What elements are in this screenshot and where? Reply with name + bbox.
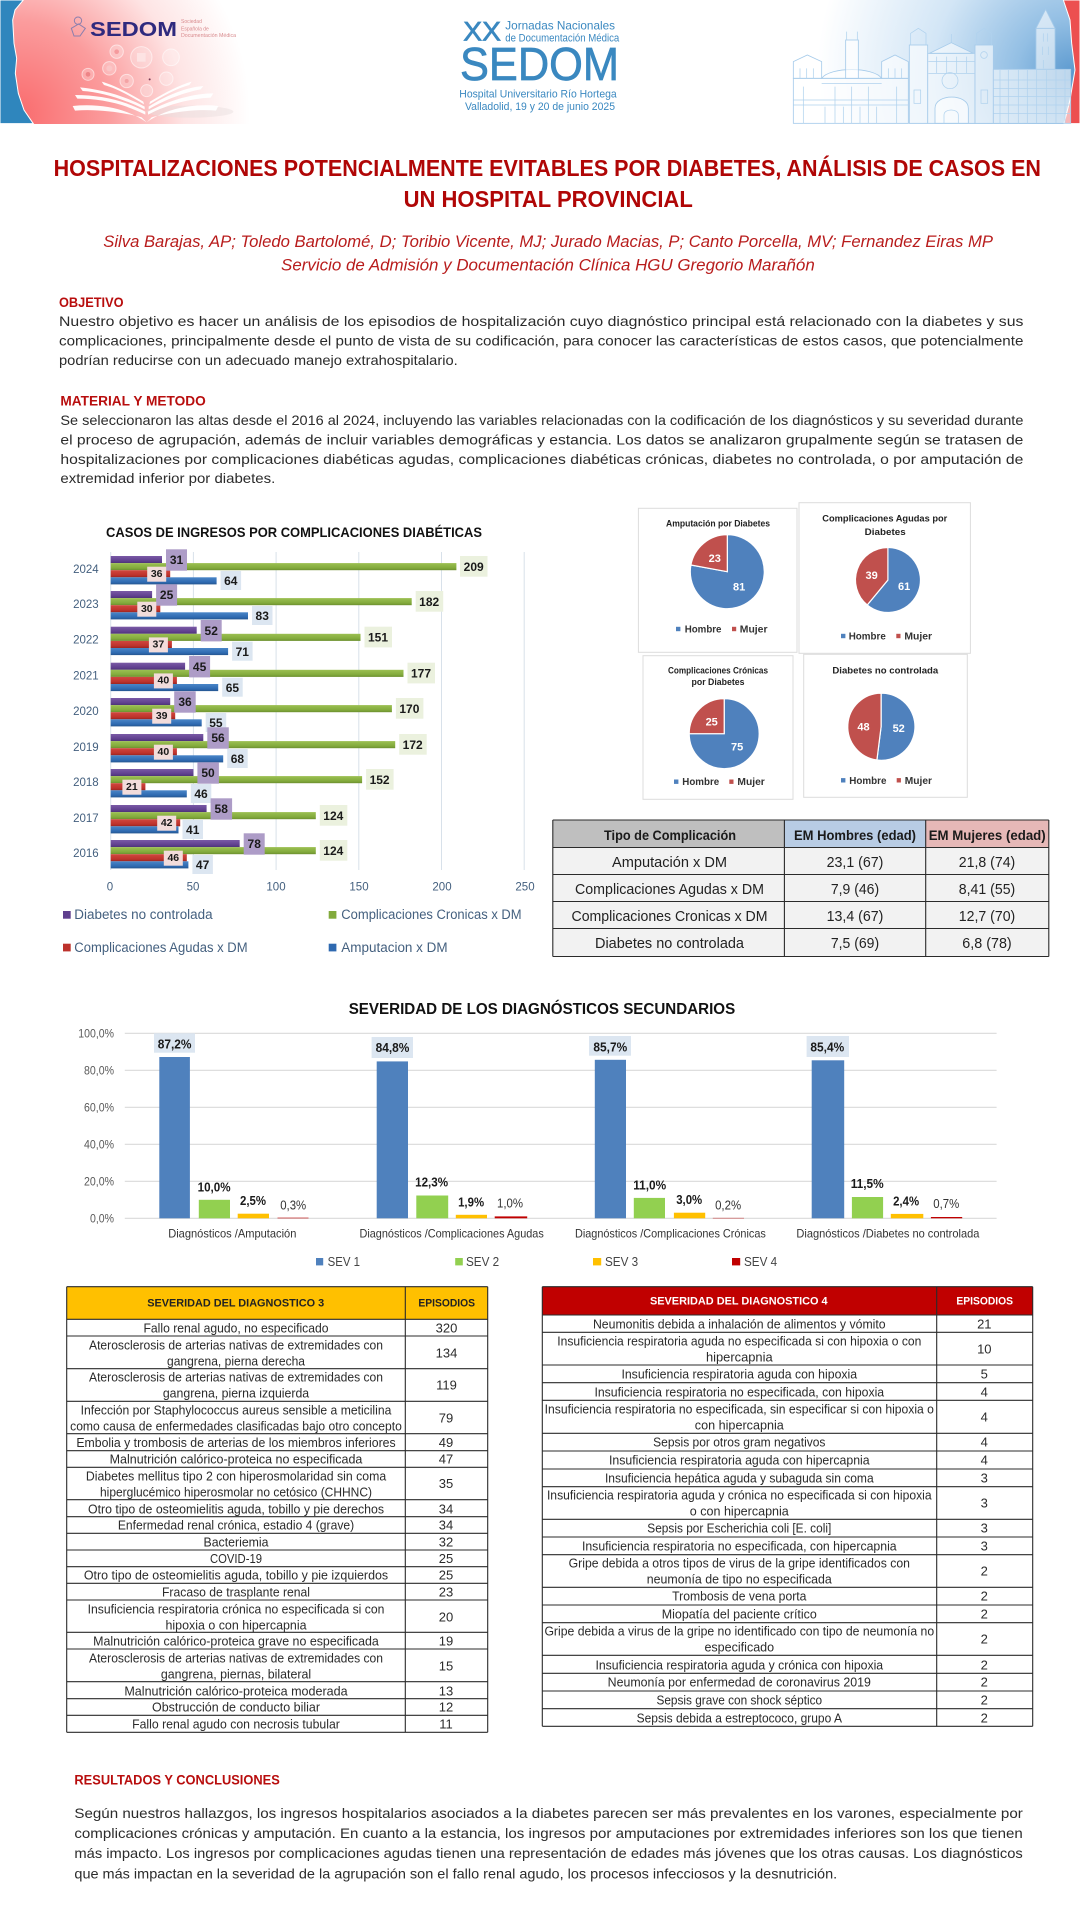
year 2024: 64: [224, 574, 238, 588]
year 2019: 2019: [73, 742, 99, 754]
text block: resultados: que más impactan en la severidad de la agrupación son el fallo renal agudo, los procesos infecciosos y la desnutrición.: [74, 1866, 837, 1882]
pie chart: complicaciones agudas: Mujer: [904, 632, 932, 642]
table: severidad del diagnostico 3: 20: [439, 1609, 453, 1624]
group: complicaciones agudas: 1,9%: [458, 1196, 484, 1210]
table: severidad del diagnostico 4: 2: [981, 1657, 988, 1672]
icon: church facade: [909, 28, 993, 123]
year 2024: 31: [170, 553, 183, 567]
chart legend: Diabetes no controlada: [74, 907, 213, 922]
year 2016: 46: [167, 852, 179, 864]
icon: society logo: [71, 17, 85, 36]
table: estancia media por complicación: Complicaciones Agudas x DM: [575, 882, 764, 898]
bar chart: casos de ingresos: [63, 524, 535, 955]
text block: material y metodo: el proceso de agrupación, además de incluir variables demográficas y estancia. Los datos se analizaron grupalmente según se tratasen de: [60, 432, 1024, 448]
year 2024: 2024: [73, 564, 99, 576]
chart legend: Complicaciones Cronicas x DM: [341, 907, 522, 922]
table: estancia media por complicación: 7,5 (69): [831, 936, 879, 952]
group: amputación: [154, 1033, 308, 1218]
table: severidad del diagnostico 4: Insuficiencia respiratoria aguda no especificada si con hipoxia o con: [557, 1333, 921, 1348]
table: severidad del diagnostico 3: hipoxia o con hipercapnia: [166, 1617, 307, 1632]
text block: material y metodo: Se seleccionaron las altas desde el 2016 al 2024, incluyendo las variables relacionadas con la codificación de los diagnósticos y su severidad durante: [60, 412, 1024, 428]
table: estancia media por complicación: Amputación x DM: [612, 855, 727, 871]
icon: town hall building: [793, 32, 908, 123]
table: severidad del diagnostico 3: 49: [439, 1435, 453, 1450]
text block: material y metodo: hospitalizaciones por complicaciones diabéticas agudas, complicaciones diabéticas crónicas, diabetes no controlada, o por amputación de: [60, 451, 1024, 467]
pie chart: amputación por diabetes: 81: [733, 581, 745, 593]
table: severidad del diagnostico 4: especificado: [704, 1639, 774, 1654]
year 2018: 21: [126, 781, 138, 793]
logo subtitle: Sociedad: [181, 19, 202, 25]
table: estancia media por complicación: 13,4 (67): [827, 909, 883, 925]
group: complicaciones agudas: [372, 1037, 527, 1218]
table: estancia media por complicación: 7,9 (46): [831, 882, 879, 898]
table: severidad del diagnostico 3: Malnutrición calórico-proteica grave no especificada: [93, 1633, 380, 1648]
chart legend: SEV 4: [744, 1254, 777, 1269]
torn blue band: [0, 0, 33, 124]
year 2022: 71: [236, 645, 249, 659]
table: severidad del diagnostico 4: Insuficiencia respiratoria no especificada, con hipercapnia: [582, 1538, 897, 1553]
table: severidad del diagnostico 3: 25: [439, 1551, 453, 1566]
pie chart: diabetes no controlada: Hombre: [849, 776, 887, 787]
x axis labels: 50: [187, 882, 199, 894]
group: amputación: 2,5%: [240, 1194, 266, 1208]
table: severidad del diagnostico 4: Sepsis por Escherichia coli [E. coli]: [647, 1520, 831, 1535]
y axis labels: [78, 1028, 114, 1225]
group: amputación: 87,2%: [158, 1038, 192, 1052]
table: severidad del diagnostico 4: 2: [981, 1606, 988, 1621]
table: severidad del diagnostico 4: Insuficiencia respiratoria no especificada, sin especificar si con hipoxia o: [545, 1401, 934, 1416]
year 2023: 182: [419, 595, 440, 609]
table: severidad del diagnostico 4: Insuficiencia respiratoria aguda y crónica con hipoxia: [595, 1657, 884, 1672]
table: severidad del diagnostico 4: hipercapnia: [706, 1349, 773, 1364]
text block: material y metodo: extremidad inferior por diabetes.: [60, 470, 275, 486]
text block: resultados: complicaciones crónicas y amputación. En cuanto a la estancia, los ingresos por amputaciones por extremidades inferiores son los que tienen: [74, 1825, 1023, 1841]
logo subtitle: Española de: [181, 26, 209, 32]
group: diabetes no controlada: 11,5%: [851, 1177, 884, 1191]
banner: congress logo: XX: [463, 17, 501, 47]
chart heading: SEVERIDAD DE LOS DIAGNÓSTICOS SECUNDARIOS: [349, 999, 736, 1018]
year 2018: 46: [194, 787, 208, 801]
year 2024: 209: [464, 560, 484, 574]
year 2017: 42: [161, 817, 173, 829]
table: estancia media por complicación: Tipo de Complicación: [604, 827, 736, 843]
year 2021: 2021: [73, 671, 99, 683]
table: estancia media por complicación: 6,8 (78): [962, 936, 1012, 952]
year 2017: 2017: [73, 813, 99, 825]
bubbles of documents: [82, 45, 179, 97]
group: complicaciones crónicas: 85,7%: [593, 1040, 627, 1054]
table: severidad del diagnostico 3: Fallo renal agudo con necrosis tubular: [132, 1716, 340, 1731]
y axis labels: 60,0%: [84, 1102, 114, 1114]
table: severidad del diagnostico 3: 79: [439, 1410, 453, 1425]
text block: objetivo: complicaciones, principalmente desde el punto de vista de su codificación, para conocer las características de estos casos, que potencialmente: [59, 332, 1024, 348]
pie chart: amputación por diabetes: Hombre: [685, 624, 722, 636]
table: severidad del diagnostico 3: Insuficiencia respiratoria crónica no especificada si con: [88, 1601, 384, 1616]
year 2023: 30: [141, 603, 153, 615]
group: complicaciones crónicas: 0,2%: [715, 1198, 741, 1212]
table: severidad del diagnostico 4: 2: [981, 1674, 988, 1689]
year 2016: 47: [196, 858, 210, 872]
year 2016: 2016: [73, 848, 99, 860]
year 2022: [73, 620, 392, 661]
table: severidad del diagnostico 4: EPISODIOS: [956, 1296, 1013, 1308]
pie chart: complicaciones crónicas: 25: [706, 717, 718, 729]
banner: congress logo: Hospital Universitario Río Hortega: [459, 88, 618, 100]
pie chart: amputación por diabetes: [638, 508, 797, 652]
year 2016: 78: [248, 837, 261, 851]
year 2021: 40: [158, 675, 169, 687]
y axis labels: 40,0%: [84, 1139, 114, 1151]
banner: congress logo: de Documentación Médica: [505, 32, 620, 44]
table: severidad del diagnostico 4: o con hipercapnia: [690, 1503, 790, 1518]
table: severidad del diagnostico 3: Enfermedad renal crónica, estadio 4 (grave): [118, 1517, 354, 1532]
section: material y metodo: [60, 394, 1024, 486]
table: severidad del diagnostico 3: 34: [439, 1517, 453, 1532]
table: estancia media por complicación: 21,8 (74): [959, 855, 1015, 871]
table: severidad del diagnostico 4: 4: [981, 1409, 988, 1424]
text block: objetivo: [59, 313, 1024, 368]
table: severidad del diagnostico 3: COVID-19: [210, 1551, 262, 1566]
table: severidad del diagnostico 3: EPISODIOS: [418, 1298, 475, 1310]
chart legend: SEV 1: [328, 1254, 360, 1269]
year 2017: 41: [186, 823, 200, 837]
table: severidad del diagnostico 4: 3: [981, 1538, 988, 1553]
group: diabetes no controlada: 2,4%: [893, 1194, 919, 1208]
table: severidad del diagnostico 4: Insuficiencia respiratoria no especificada, con hipoxia: [594, 1384, 885, 1399]
x axis labels: [107, 882, 535, 894]
table: severidad del diagnostico 3: 25: [439, 1567, 453, 1582]
table: severidad del diagnostico 3: hiperglucémico hiperosmolar no cetósico (CHHNC): [100, 1484, 372, 1499]
column chart: severidad de los diagnósticos secundarios: [78, 999, 997, 1269]
table: severidad del diagnostico 4: Insuficiencia respiratoria aguda con hipercapnia: [609, 1452, 870, 1467]
y axis labels: 20,0%: [84, 1176, 114, 1188]
year 2021: 45: [193, 660, 207, 674]
pie chart: complicaciones agudas: [799, 503, 970, 653]
table: severidad del diagnostico 3: Bacteriemia: [204, 1534, 269, 1549]
pie chart: complicaciones crónicas: 75: [731, 742, 743, 754]
text block: objetivo: podrían reducirse con un adecuado manejo extrahospitalario.: [59, 352, 458, 368]
table: severidad del diagnostico 4: 3: [981, 1520, 988, 1535]
pie chart: complicaciones crónicas: [643, 656, 793, 799]
table: estancia media por complicación: EM Hombres (edad): [794, 827, 916, 843]
group: complicaciones crónicas: 3,0%: [676, 1193, 702, 1207]
table: severidad del diagnostico 4: neumonía de tipo no especificada: [647, 1571, 833, 1586]
pie chart: diabetes no controlada: Diabetes no controlada: [832, 665, 939, 675]
table: severidad del diagnostico 3: 47: [439, 1451, 453, 1466]
table: severidad del diagnostico 3: 11: [439, 1716, 453, 1731]
x axis labels: 200: [432, 882, 452, 894]
year 2022: 2022: [73, 635, 99, 647]
x axis labels: 250: [515, 882, 535, 894]
pie chart: complicaciones crónicas: Mujer: [737, 777, 765, 788]
table: severidad del diagnostico 4: 10: [977, 1341, 992, 1356]
pie chart: amputación por diabetes: 23: [709, 553, 721, 565]
year 2020: 2020: [73, 706, 99, 718]
pie chart: complicaciones agudas: Complicaciones Agudas por: [822, 514, 948, 524]
table: severidad del diagnostico 3: Fracaso de trasplante renal: [162, 1584, 310, 1599]
heading: objetivo: OBJETIVO: [59, 295, 124, 310]
logo subtitle: [181, 19, 236, 39]
table: severidad del diagnostico 4: 2: [981, 1631, 988, 1646]
group: complicaciones agudas: 84,8%: [376, 1041, 409, 1055]
table: severidad del diagnostico 3: gangrena, piernas, bilateral: [161, 1666, 311, 1681]
heading: resultados: RESULTADOS Y CONCLUSIONES: [74, 1773, 280, 1788]
year 2019: [73, 727, 427, 768]
table: severidad del diagnostico 3: 13: [439, 1683, 453, 1698]
text block: material y metodo: [60, 412, 1024, 486]
x axis labels: 100: [266, 882, 286, 894]
heading: material y metodo: MATERIAL Y METODO: [60, 394, 206, 409]
authors and affiliation: [103, 233, 993, 274]
banner: left society branding: [0, 0, 255, 124]
table: severidad del diagnostico 3: Aterosclerosis de arterias nativas de extremidades con: [89, 1337, 383, 1352]
table: severidad del diagnostico 4: con hipercapnia: [695, 1417, 785, 1432]
chart legend: Amputacion x DM: [341, 940, 448, 955]
table: severidad del diagnostico 3: Otro tipo de osteomielitis aguda, tobillo y pie derechos: [88, 1501, 384, 1516]
year 2019: 68: [231, 752, 244, 766]
chart heading: CASOS DE INGRESOS POR COMPLICACIONES DIABÉTICAS: [106, 524, 482, 540]
table: estancia media por complicación: Diabetes no controlada: [595, 936, 745, 952]
section: resultados y conclusiones: [74, 1773, 1023, 1882]
table: severidad del diagnostico 4: 4: [981, 1384, 988, 1399]
table: estancia media por complicación: [553, 820, 1049, 956]
group: complicaciones agudas: 12,3%: [415, 1176, 448, 1190]
y axis labels: 100,0%: [78, 1028, 114, 1040]
banner: congress logo: Jornadas Nacionales: [505, 18, 615, 32]
table: severidad del diagnostico 3: Embolia y trombosis de arterias de los miembros inferiores: [76, 1435, 396, 1450]
title: [54, 154, 1041, 212]
year 2023: 83: [256, 609, 269, 623]
title: UN HOSPITAL PROVINCIAL: [404, 186, 693, 212]
table: severidad del diagnostico 3: Aterosclerosis de arterias nativas de extremidades con: [89, 1650, 383, 1665]
table: severidad del diagnostico 4: Gripe debida a virus de la gripe no identificado con tipo de neumonía no: [544, 1624, 934, 1639]
table: severidad del diagnostico 4: 4: [981, 1434, 988, 1449]
table: estancia media por complicación: 12,7 (70): [959, 909, 1015, 925]
year 2020: 55: [209, 716, 223, 730]
year 2016: 124: [323, 844, 344, 858]
section: objetivo: [59, 295, 1024, 368]
pie chart: complicaciones agudas: Diabetes: [865, 527, 906, 537]
year 2024: 36: [151, 568, 163, 580]
year 2018: 50: [201, 766, 215, 780]
table: severidad del diagnostico 3: como causa de enfermedades clasificadas bajo otro concepto: [70, 1418, 402, 1433]
torn red band: [1063, 0, 1080, 124]
authors and affiliation: Silva Barajas, AP; Toledo Bartolomé, D; Toribio Vicente, MJ; Jurado Macias, P; Canto Porcella, MV; Fernandez Eiras MP: [103, 233, 993, 251]
table: severidad del diagnostico 4: 4: [981, 1452, 988, 1467]
table: severidad del diagnostico 4: Insuficiencia hepática aguda y subaguda sin coma: [605, 1470, 874, 1485]
table: severidad del diagnostico 3: 35: [439, 1476, 453, 1491]
chart legend: [63, 907, 522, 955]
table: estancia media por complicación: 23,1 (67): [827, 855, 883, 871]
group: diabetes no controlada: 85,4%: [810, 1040, 844, 1054]
category labels: Diagnósticos /Diabetes no controlada: [796, 1226, 980, 1240]
banner: congress logo: Valladolid, 19 y 20 de junio 2025: [465, 101, 615, 113]
table: severidad del diagnostico 4: [542, 1287, 1033, 1726]
table: severidad del diagnostico 3: 320: [436, 1320, 457, 1335]
group: complicaciones crónicas: 11,0%: [633, 1178, 666, 1192]
year 2020: 39: [156, 710, 168, 722]
year 2017: 124: [323, 809, 344, 823]
table: severidad del diagnostico 3: 134: [436, 1345, 457, 1360]
table: severidad del diagnostico 3: Otro tipo de osteomielitis aguda, tobillo y pie izquierdos: [84, 1567, 389, 1582]
pie chart: diabetes no controlada: 48: [857, 721, 870, 733]
table: severidad del diagnostico 4: 5: [981, 1366, 988, 1381]
pie chart: complicaciones agudas: Hombre: [849, 632, 886, 642]
title: HOSPITALIZACIONES POTENCIALMENTE EVITABLES POR DIABETES, ANÁLISIS DE CASOS EN: [54, 154, 1041, 181]
pie chart: amputación por diabetes: Mujer: [740, 624, 768, 636]
table: severidad del diagnostico 3: Fallo renal agudo, no especificado: [144, 1320, 328, 1335]
table: severidad del diagnostico 3: Malnutrición calórico-proteica no especificada: [110, 1451, 363, 1466]
year 2019: 40: [158, 746, 169, 758]
table: severidad del diagnostico 3: 34: [439, 1501, 453, 1516]
year 2018: 152: [370, 773, 390, 787]
icon: open book: [73, 82, 233, 122]
table: estancia media por complicación: 8,41 (55): [959, 882, 1015, 898]
table: estancia media por complicación: Complicaciones Cronicas x DM: [572, 909, 768, 925]
year 2023: 2023: [73, 599, 99, 611]
year 2024: [73, 549, 487, 590]
year 2020: 36: [178, 695, 192, 709]
group: amputación: 0,3%: [280, 1198, 306, 1212]
table: severidad del diagnostico 4: Neumonía por enfermedad de coronavirus 2019: [608, 1674, 871, 1689]
text block: resultados: Según nuestros hallazgos, los ingresos hospitalarios asociados a la diabetes parecen ser más prevalentes en los varones, especialmente por: [74, 1805, 1023, 1821]
table: severidad del diagnostico 3: 119: [436, 1377, 457, 1392]
group: diabetes no controlada: 0,7%: [933, 1197, 959, 1211]
chart legend: SEV 2: [466, 1254, 499, 1269]
table: severidad del diagnostico 3: 19: [439, 1633, 453, 1648]
x axis labels: 0: [107, 882, 113, 894]
text block: resultados: más impacto. Los ingresos por complicaciones agudas tienen una representación de edades más jóvenes que los otras causas. Los diagnósticos: [74, 1845, 1023, 1861]
table: severidad del diagnostico 4: Sepsis grave con shock séptico: [656, 1692, 822, 1707]
banner: Valladolid skyline: [793, 0, 1080, 124]
x axis labels: 150: [349, 882, 369, 894]
chart legend: Complicaciones Agudas x DM: [74, 940, 248, 955]
table: severidad del diagnostico 4: 2: [981, 1692, 988, 1707]
banner: congress logo: SEDOM: [460, 38, 619, 90]
table: severidad del diagnostico 4: Sepsis por otros gram negativos: [653, 1434, 826, 1449]
year 2020: [73, 691, 423, 732]
table: severidad del diagnostico 4: 21: [977, 1316, 992, 1331]
group: complicaciones agudas: 1,0%: [497, 1196, 523, 1210]
year 2018: 2018: [73, 777, 99, 789]
table: severidad del diagnostico 4: 3: [981, 1495, 988, 1510]
banner: congress logo: [459, 17, 620, 113]
pie chart: amputación por diabetes: Amputación por Diabetes: [666, 518, 770, 528]
table: severidad del diagnostico 3: 32: [439, 1534, 453, 1549]
table: severidad del diagnostico 4: SEVERIDAD DEL DIAGNOSTICO 4: [650, 1296, 829, 1308]
group: amputación: 10,0%: [198, 1180, 231, 1194]
year 2021: 65: [226, 681, 239, 695]
pie chart: diabetes no controlada: [804, 654, 967, 797]
table: severidad del diagnostico 4: Gripe debida a otros tipos de virus de la gripe identificados con: [569, 1555, 910, 1570]
table: severidad del diagnostico 4: Sepsis debida a estreptococo, grupo A: [637, 1710, 842, 1725]
logo text: SEDOM: SEDOM: [90, 19, 177, 41]
table: severidad del diagnostico 4: 2: [981, 1563, 988, 1578]
table: severidad del diagnostico 4: Trombosis de vena porta: [672, 1588, 807, 1603]
category labels: Diagnósticos /Complicaciones Crónicas: [575, 1226, 766, 1240]
table: severidad del diagnostico 4: 3: [981, 1470, 988, 1485]
table: severidad del diagnostico 3: Diabetes mellitus tipo 2 con hiperosmolaridad sin coma: [86, 1468, 387, 1483]
pie chart: complicaciones agudas: 61: [898, 581, 910, 593]
table: severidad del diagnostico 4: Insuficiencia respiratoria aguda y crónica no especificada si con hipoxia: [547, 1487, 932, 1502]
table: severidad del diagnostico 3: Infección por Staphylococcus aureus sensible a meticilina: [81, 1402, 392, 1417]
group: complicaciones crónicas: [589, 1036, 744, 1218]
y axis labels: 0,0%: [90, 1213, 114, 1225]
year 2017: [73, 798, 347, 839]
year 2021: 177: [411, 667, 431, 681]
table: severidad del diagnostico 3: Aterosclerosis de arterias nativas de extremidades con: [89, 1369, 383, 1384]
category labels: [168, 1226, 980, 1240]
year 2022: 37: [153, 639, 164, 651]
authors and affiliation: Servicio de Admisión y Documentación Clínica HGU Gregorio Marañón: [281, 256, 815, 274]
pie chart: complicaciones crónicas: por Diabetes: [692, 677, 744, 687]
icon: bell tower and palace: [993, 9, 1071, 123]
chart legend: [316, 1254, 777, 1269]
pie chart: diabetes no controlada: Mujer: [905, 776, 932, 787]
table: severidad del diagnostico 4: 2: [981, 1588, 988, 1603]
logo subtitle: Documentación Médica: [181, 33, 236, 39]
year 2017: 58: [215, 802, 228, 816]
pie chart: diabetes no controlada: 52: [893, 723, 905, 735]
category labels: Diagnósticos /Amputación: [168, 1226, 296, 1240]
text block: objetivo: Nuestro objetivo es hacer un análisis de los episodios de hospitalización cuyo diagnóstico principal está relacionado con la diabetes y sus: [59, 313, 1023, 329]
table: severidad del diagnostico 3: SEVERIDAD DEL DIAGNOSTICO 3: [147, 1298, 324, 1310]
year 2022: 151: [368, 631, 388, 645]
year 2019: 56: [211, 731, 225, 745]
table: severidad del diagnostico 4: 2: [981, 1710, 988, 1725]
table: severidad del diagnostico 3: gangrena, pierna izquierda: [163, 1385, 310, 1400]
table: severidad del diagnostico 3: 12: [439, 1699, 453, 1714]
year 2019: 172: [403, 738, 423, 752]
year 2022: 52: [205, 624, 218, 638]
text block: resultados: [74, 1805, 1023, 1882]
table: severidad del diagnostico 3: 15: [439, 1658, 453, 1673]
table: estancia media por complicación: EM Mujeres (edad): [929, 827, 1046, 843]
year 2021: [73, 656, 435, 697]
category labels: Diagnósticos /Complicaciones Agudas: [360, 1226, 544, 1240]
table: severidad del diagnostico 3: 23: [439, 1584, 453, 1599]
table: severidad del diagnostico 4: Insuficiencia respiratoria aguda con hipoxia: [621, 1366, 858, 1381]
year 2018: [73, 762, 394, 803]
pie chart: complicaciones agudas: 39: [865, 570, 878, 582]
chart legend: SEV 3: [605, 1254, 638, 1269]
y axis labels: 80,0%: [84, 1065, 114, 1077]
pie chart: complicaciones crónicas: Hombre: [682, 777, 720, 788]
group: diabetes no controlada: [807, 1036, 962, 1218]
table: severidad del diagnostico 3: Obstrucción de conducto biliar: [152, 1699, 321, 1714]
table: severidad del diagnostico 4: Neumonitis debida a inhalación de alimentos y vómito: [593, 1316, 886, 1331]
table: severidad del diagnostico 3: [67, 1287, 488, 1732]
pie chart: complicaciones crónicas: Complicaciones Crónicas: [668, 665, 768, 675]
year 2016: [73, 833, 347, 874]
table: severidad del diagnostico 3: gangrena, pierna derecha: [167, 1353, 306, 1368]
year 2020: 170: [399, 702, 420, 716]
table: severidad del diagnostico 4: Miopatía del paciente crítico: [662, 1606, 817, 1621]
year 2023: 25: [160, 588, 174, 602]
table: severidad del diagnostico 3: Malnutrición calórico-proteica moderada: [124, 1683, 348, 1698]
year 2023: [73, 584, 443, 625]
